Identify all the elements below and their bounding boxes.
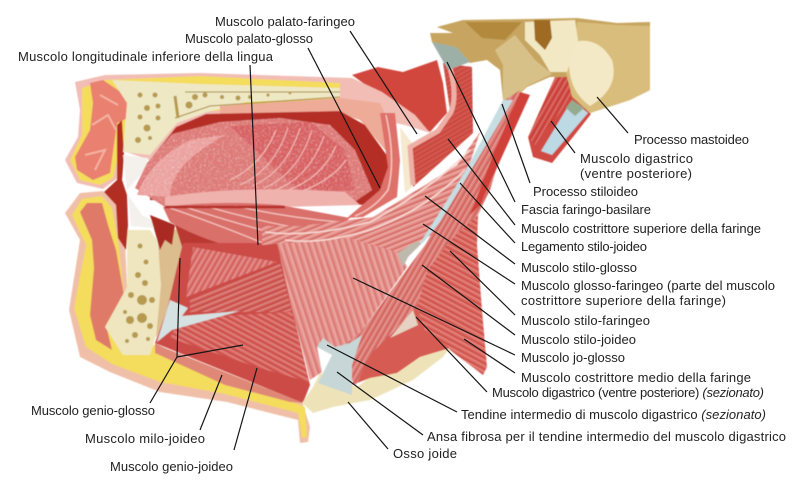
tissue between mandible and floor muscles: [156, 228, 186, 338]
chin fat layer: [72, 196, 307, 438]
label: Muscolo milo-joideo: [85, 375, 222, 446]
mandible section: [105, 230, 162, 355]
label: Muscolo costrittore superiore della faringe: [448, 139, 761, 236]
white palatal fold: [400, 127, 412, 193]
label: Processo mastoideo: [597, 97, 749, 147]
label: Fascia faringo-basilare: Fascia faringo-basilare: [521, 202, 651, 217]
palato-glosso arch: [347, 113, 400, 218]
label: Muscolo stilo-faringeo: [450, 251, 650, 328]
label: Muscolo palato-faringeo: Muscolo palato-faringeo: [215, 14, 355, 29]
label: Ansa fibrosa: [337, 372, 786, 444]
label: Muscolo genio-joideo: Muscolo genio-joideo: [110, 459, 233, 474]
vestibule dark fissure and white gaps: [104, 120, 175, 250]
label: Muscolo palato-glosso: [185, 31, 380, 188]
label: Muscolo milo-joideo: Muscolo milo-joideo: [85, 431, 205, 446]
lower lip and chin skin: [65, 191, 310, 443]
label: Muscolo genio-glosso: [31, 258, 243, 418]
label: Muscolo digastrico (ventre posteriore): [551, 121, 693, 181]
anatomical illustration: [65, 18, 650, 443]
posterior digastric belly, sectioned: [528, 77, 591, 163]
palatine glands: [220, 98, 395, 150]
posterior constrictor right mass: [417, 215, 487, 375]
stylo-hyoid and digastric bundle: [338, 90, 530, 385]
label: Osso joide: Osso joide: [393, 446, 457, 461]
label: Muscolo jo-glosso: [353, 278, 625, 365]
pharyngeal flap behind palate: [352, 60, 447, 132]
label: Muscolo stilo-joideo: [422, 265, 636, 347]
label: Muscolo glosso-faringeo: costrittore superiore della faringe): [521, 293, 726, 308]
label: Tendine intermedio di muscolo digastrico: Tendine intermedio di muscolo digastrico (sezionato): [461, 407, 766, 422]
tongue: [130, 115, 375, 210]
muscle milo-joideo: [155, 243, 310, 403]
constrictor muscle top: [410, 42, 473, 187]
label: Legamento stilo-joideo: [460, 183, 647, 254]
label: Muscolo stilo-glosso: [425, 196, 637, 275]
label: Muscolo digastrico (ventre posteriore) (sezionato): Muscolo digastrico (ventre posteriore) (sezionato): [492, 385, 764, 400]
hyoid bone: [302, 348, 450, 413]
pale tendon: [390, 310, 418, 338]
label: Muscolo costrittore superiore della faringe: Muscolo costrittore superiore della faringe: [521, 221, 761, 236]
label: Muscolo digastrico (ventre posteriore): Muscolo digastrico: [580, 151, 693, 166]
label: Muscolo costrittore medio della faringe: Muscolo costrittore medio della faringe: [521, 370, 751, 385]
label: Muscolo digastrico (ventre posteriore) (sezionato): [416, 317, 764, 400]
grey gap: [398, 242, 423, 267]
label: Processo mastoideo: Processo mastoideo: [634, 132, 749, 147]
digastric intermediate tendon: [317, 335, 362, 395]
label: Muscolo genio-joideo: [110, 368, 257, 474]
label: Muscolo digastrico (ventre posteriore): (ventre posteriore): [580, 166, 692, 181]
label: Tendine intermedio di muscolo digastrico: [327, 345, 766, 422]
label: Muscolo glosso-faringeo: Muscolo glosso-faringeo (parte del muscolo: [521, 278, 775, 293]
label: Muscolo palato-glosso: Muscolo palato-glosso: [185, 31, 313, 46]
mentalis muscle: [80, 203, 124, 350]
label: Muscolo palato-faringeo: [215, 14, 417, 134]
label: Muscolo glosso-faringeo: [423, 224, 775, 308]
label: Muscolo costrittore medio della faringe: [464, 339, 751, 385]
label: Processo stiloideo: Processo stiloideo: [533, 184, 638, 199]
label: Legamento stilo-joideo: Legamento stilo-joideo: [521, 239, 647, 254]
tile-like gland band: [155, 343, 303, 403]
label: Processo stiloideo: [502, 104, 638, 199]
label: Muscolo genio-glosso: Muscolo genio-glosso: [31, 403, 155, 418]
upper lip skin and fat: [65, 73, 430, 189]
palate bone: [112, 80, 340, 155]
muscle stilo-glosso fan: [262, 132, 480, 253]
label: Muscolo longitudinale inferiore della lingua: Muscolo longitudinale inferiore della lingua: [18, 49, 274, 64]
skull base bone: [430, 18, 650, 113]
label: Muscolo stilo-faringeo: Muscolo stilo-faringeo: [521, 313, 650, 328]
muscle jo-glosso sheet: [277, 232, 407, 380]
label: Ansa fibrosa: Ansa fibrosa per il tendine intermedio del muscolo digastrico: [427, 429, 786, 444]
oral cavity: [150, 111, 392, 205]
label: Muscolo stilo-glosso: Muscolo stilo-glosso: [521, 260, 637, 275]
sublingual fibres (longitudinal muscle): [163, 203, 350, 258]
label: Muscolo stilo-joideo: Muscolo stilo-joideo: [521, 332, 636, 347]
hyoglossal fan: [352, 307, 450, 385]
label: Fascia faringo-basilare: [447, 62, 651, 217]
dark red under the sublingual fibres: [172, 215, 285, 255]
label: Muscolo jo-glosso: Muscolo jo-glosso: [521, 350, 625, 365]
label: Muscolo longitudinale inferiore della lingua: [18, 49, 274, 245]
label: Osso joide: [348, 402, 457, 461]
